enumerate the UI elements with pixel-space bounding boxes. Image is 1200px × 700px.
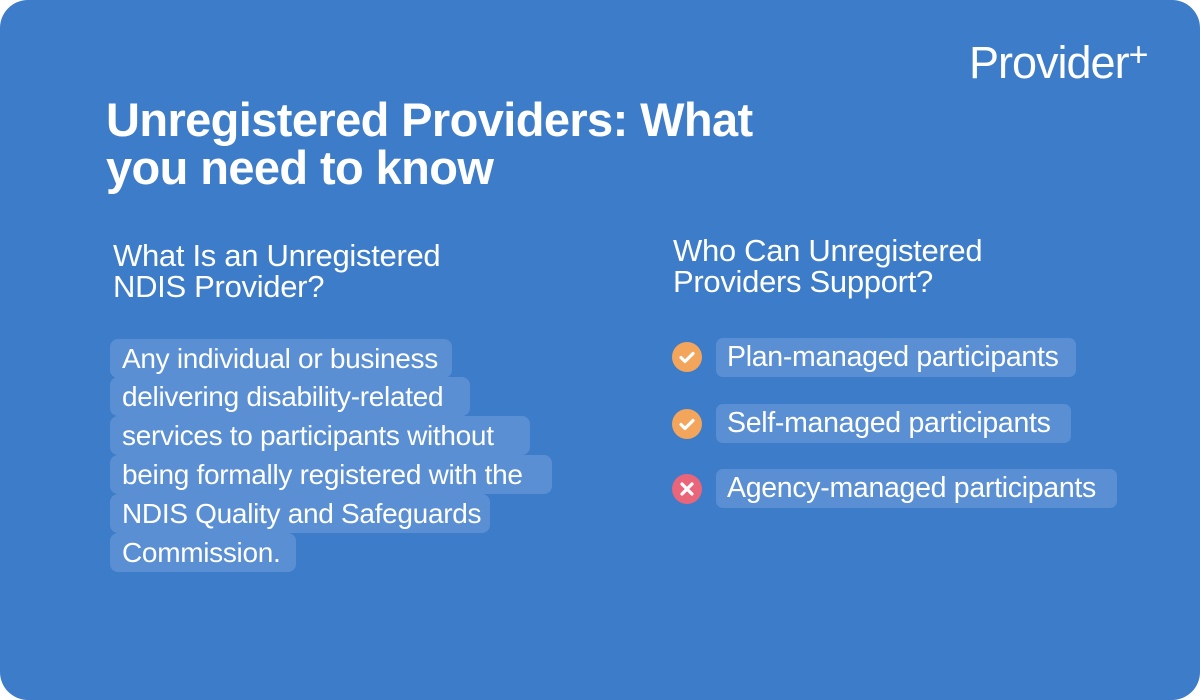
item: self-managed — [672, 404, 1071, 443]
item: agency-managed — [672, 469, 1117, 508]
icon: check — [672, 342, 702, 372]
heading: what is — [113, 238, 440, 304]
definition text block: services to participants without — [122, 420, 494, 451]
title: Unregistered Providers: What — [106, 93, 753, 146]
definition text block — [110, 339, 552, 572]
heading: who can: Providers Support? — [673, 264, 933, 299]
definition text block: being formally registered with the — [122, 459, 523, 490]
definition text block: Commission. — [122, 537, 281, 568]
heading: what is: NDIS Provider? — [113, 269, 324, 304]
item: plan-managed — [672, 338, 1076, 377]
definition text block: NDIS Quality and Safeguards — [122, 498, 481, 529]
icon: cross — [672, 474, 702, 504]
text: Plan-managed participants — [727, 341, 1059, 373]
text: Self-managed participants — [727, 407, 1051, 439]
heading: what is: What Is an Unregistered — [113, 238, 440, 273]
definition text block: Any individual or business — [122, 343, 438, 374]
title: you need to know — [106, 141, 493, 194]
heading: who can — [673, 233, 982, 299]
icon: check — [672, 409, 702, 439]
definition text block: delivering disability-related — [122, 381, 443, 412]
text: Agency-managed participants — [727, 472, 1096, 504]
heading: who can: Who Can Unregistered — [673, 233, 982, 268]
title — [106, 93, 753, 194]
logo: Provider+ — [969, 36, 1147, 88]
